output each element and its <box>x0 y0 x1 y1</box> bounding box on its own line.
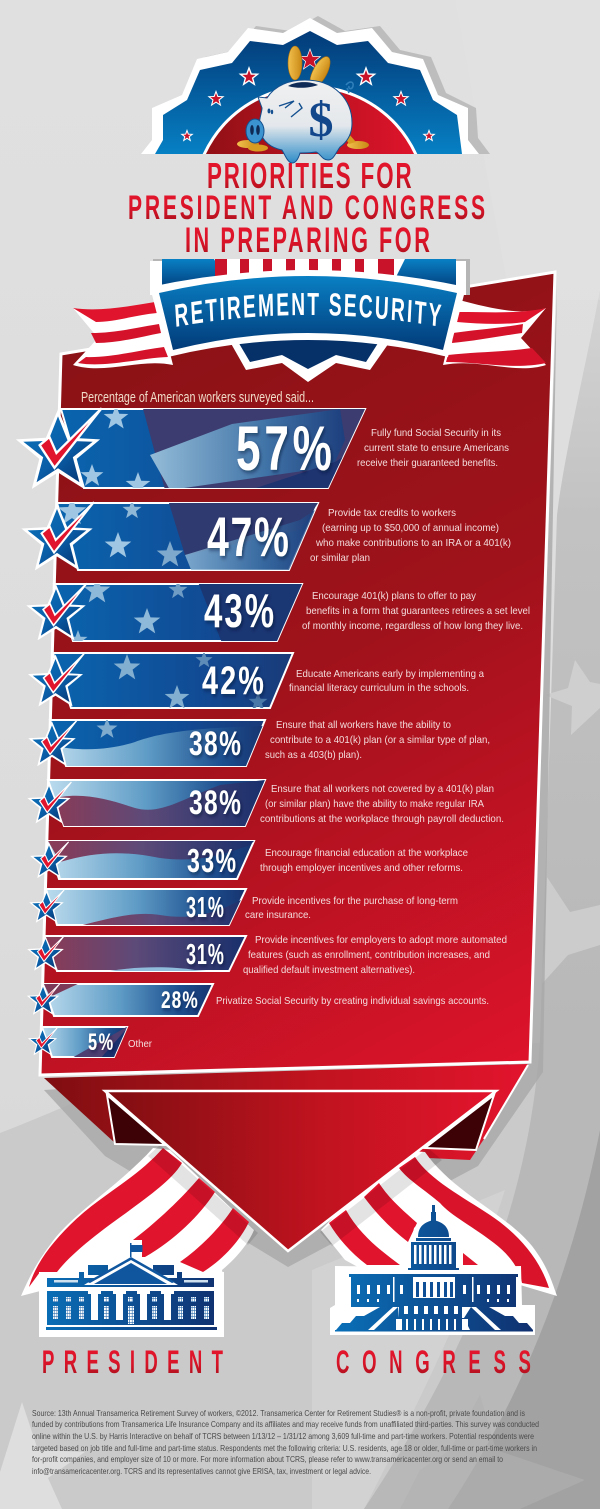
bar 6: 38%: 38% <box>189 784 241 822</box>
icon: star check <box>28 721 77 766</box>
bar 2: 47% <box>57 497 320 572</box>
statement 5: such as a 403(b) plan). <box>265 750 362 761</box>
bar 5: 38% <box>50 718 265 768</box>
ribbon panel: dark fold right <box>425 1095 494 1150</box>
statement 5 <box>265 720 490 761</box>
bar 9: 31%: 31% <box>186 939 224 971</box>
statement 11: Other <box>128 1039 152 1050</box>
icon: star check <box>27 935 65 971</box>
statement 3 <box>302 591 530 632</box>
bar 7: 33%: 33% <box>187 843 236 880</box>
statement 3: benefits in a form that guarantees retirees a set level <box>306 606 530 617</box>
statement 2: Provide tax credits to workers <box>328 508 456 519</box>
statement 2: or similar plan <box>310 553 370 564</box>
bar 1: 57%: 57% <box>236 413 332 484</box>
statement 7: Encourage financial education at the workplace <box>265 848 468 859</box>
icon: star check <box>28 654 84 706</box>
statement 1: Fully fund Social Security in its <box>371 428 501 439</box>
source note: for-profit companies, and employer size of 10 or more. For more information about TCRS, please refer to www.transamericacenter.org or send an email to <box>32 1454 503 1464</box>
statement 6: (or similar plan) have the ability to make regular IRA <box>265 799 484 810</box>
bar 11: 5%: 5% <box>88 1029 113 1056</box>
statement 8 <box>245 896 458 921</box>
bar 6: 38% <box>48 780 265 828</box>
statement 2 <box>310 508 511 564</box>
statement 2: (earning up to $50,000 of annual income) <box>322 523 499 534</box>
left ribbon: President <box>21 1145 258 1296</box>
statement 2: who make contributions to an IRA or a 401(k) <box>315 538 511 549</box>
statement 7 <box>260 848 468 874</box>
bar 5: 38%: 38% <box>189 725 241 763</box>
coins <box>237 46 369 152</box>
title: IN PREPARING FOR <box>185 222 430 260</box>
bar 10: 28%: 28% <box>161 987 198 1014</box>
statement 6: Ensure that all workers not covered by a 401(k) plan <box>271 784 494 795</box>
icon: star check <box>29 890 64 923</box>
badge: piggy bank emblem <box>141 16 490 164</box>
bar 2: 47%: 47% <box>207 506 289 569</box>
banner: Retirement Security: RETIREMENT SECURITY <box>175 293 442 327</box>
icon: star check <box>28 1027 58 1055</box>
icon: White House <box>39 1240 224 1337</box>
bar 8: 31% <box>46 889 250 927</box>
bar 11: 5% <box>42 1025 130 1059</box>
statement 4: Educate Americans early by implementing a <box>296 669 484 680</box>
statement 6 <box>260 784 504 825</box>
statement 1 <box>357 428 509 469</box>
main red panel <box>40 272 555 1075</box>
statement 3: Encourage 401(k) plans to offer to pay <box>312 591 477 602</box>
label: Congress: CONGRESS <box>336 1344 531 1380</box>
icon: star check <box>21 502 94 570</box>
left flag ribbon <box>73 302 173 368</box>
statement 3: of monthly income, regardless of how long they live. <box>302 621 523 632</box>
statement 6: contributions at the workplace through payroll deduction. <box>260 814 504 825</box>
bar 4: 42%: 42% <box>202 658 264 703</box>
bar 10: 28% <box>43 982 213 1016</box>
icon: star check <box>27 782 71 823</box>
icon: star check <box>16 408 102 489</box>
lead-in text: Percentage of American workers surveyed said... <box>81 389 314 406</box>
statement 10: Privatize Social Security by creating individual savings accounts. <box>216 996 489 1007</box>
pig: $ <box>308 91 334 147</box>
statement 1: current state to ensure Americans <box>364 443 509 454</box>
bar 4: 42% <box>53 651 293 710</box>
ribbon panel: dark fold left <box>107 1095 165 1145</box>
shield behind the banner <box>150 259 470 382</box>
statement 9: qualified default investment alternatives). <box>243 965 415 976</box>
source note <box>32 1408 539 1476</box>
title <box>128 157 485 260</box>
right flag ribbon <box>443 300 546 368</box>
icon: star check <box>26 583 87 640</box>
statement 9: features (such as enrollment, contribution increases, and <box>248 950 490 961</box>
icon: US Capitol <box>330 1203 535 1335</box>
statement 9: Provide incentives for employers to adopt more automated <box>255 935 507 946</box>
pig <box>246 80 353 163</box>
main panel shadow <box>44 285 557 1267</box>
statement 4 <box>289 669 484 694</box>
statement 4: financial literacy curriculum in the schools. <box>289 683 469 694</box>
bar 3: 43%: 43% <box>204 584 274 637</box>
title: PRESIDENT AND CONGRESS <box>128 188 485 226</box>
statement 5: contribute to a 401(k) plan (or a similar type of plan, <box>270 735 490 746</box>
bar 7: 33% <box>47 839 256 880</box>
statement 9 <box>243 935 507 976</box>
statement 1: receive their guaranteed benefits. <box>357 458 498 469</box>
ribbon panel: lower fold <box>44 1064 528 1160</box>
stars around the pig <box>180 48 436 142</box>
bar 9: 31% <box>44 936 246 973</box>
banner: Retirement Security <box>152 270 464 357</box>
bar 1: 57% <box>60 408 366 489</box>
label: President: PRESIDENT <box>42 1344 223 1380</box>
source note: info@transamericacenter.org. TCRS and its representatives cannot give ERISA, tax, investment or legal advice. <box>32 1466 371 1476</box>
statement 5: Ensure that all workers have the ability to <box>276 720 451 731</box>
right ribbon: Congress <box>320 1148 557 1296</box>
title: PRIORITIES FOR <box>207 157 412 196</box>
icon: star check <box>27 984 60 1015</box>
statement 7: through employer incentives and other reforms. <box>260 863 463 874</box>
icon: star check <box>30 842 69 878</box>
statement 8: care insurance. <box>245 910 311 921</box>
ribbon panel: front pennant <box>105 1091 496 1251</box>
bar 3: 43% <box>52 583 304 642</box>
statement 8: Provide incentives for the purchase of long-term <box>252 896 458 907</box>
bar 8: 31%: 31% <box>186 892 224 924</box>
